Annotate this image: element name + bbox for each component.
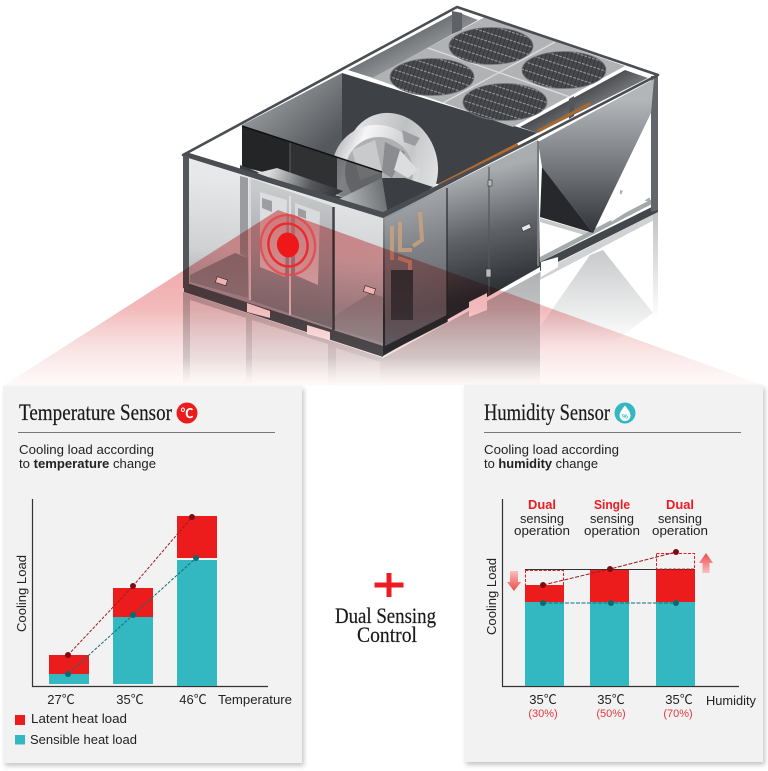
- icon: humidity badge: %: [622, 414, 628, 420]
- chart: temperature stacked bars: [14, 499, 292, 707]
- chart: humidity stacked bars: (70%): [663, 708, 693, 720]
- text: dual sensing control: [335, 603, 436, 647]
- icon: temperature badge: [176, 402, 198, 424]
- machine: copper pipes: [388, 143, 519, 216]
- sensing mode labels: Dual: [666, 497, 694, 512]
- machine: filter banks: [242, 126, 382, 198]
- text: dual sensing control: Control: [357, 622, 417, 647]
- arrow: humidity up: [699, 553, 713, 573]
- machine: interior floor left: [190, 253, 248, 298]
- machine: rear left wall: [242, 73, 342, 165]
- chart: temperature stacked bars: Temperature: [218, 692, 292, 707]
- machine: side handles: [486, 180, 531, 277]
- chart: humidity stacked bars: 35℃: [529, 692, 557, 707]
- sensing mode labels: Single: [594, 497, 630, 512]
- text: humidity description: [484, 442, 619, 471]
- sensing mode labels: operation: [652, 523, 708, 538]
- chart: temperature stacked bars: 27℃: [47, 692, 75, 707]
- machine: left post: [183, 155, 189, 290]
- heading: temperature sensor: Temperature Sensor: [19, 400, 172, 425]
- chart: humidity stacked bars: (30%): [528, 708, 558, 720]
- icon: plus: [374, 573, 404, 597]
- machine: fan deck: [372, 17, 625, 127]
- machine: deck seams: [428, 42, 570, 103]
- sensing mode labels: Dual: [528, 497, 556, 512]
- chart: humidity stacked bars: 35℃: [597, 692, 625, 707]
- machine: coil opening: [520, 70, 648, 133]
- sensing mode labels: sensing: [590, 511, 634, 526]
- machine: wedge: [540, 167, 593, 233]
- text: dual sensing control: Dual Sensing: [335, 603, 436, 628]
- panel: temperature sensor: [3, 386, 302, 763]
- machine: top frame: [183, 7, 658, 217]
- legend: [15, 711, 137, 747]
- chart: humidity stacked bars: Cooling Load: [484, 558, 499, 635]
- floor reflection: [183, 212, 658, 386]
- chart: humidity stacked bars: (50%): [596, 708, 626, 720]
- red sensing beam: [3, 210, 763, 386]
- machine: base white gaps: [469, 115, 651, 317]
- text: temperature description: [19, 442, 156, 471]
- sensing mode labels: operation: [584, 523, 640, 538]
- machine: top frame front edges: [183, 137, 538, 216]
- machine: front doors: [250, 178, 334, 330]
- machine: control box: [240, 165, 433, 217]
- machine: [183, 7, 658, 357]
- chart: temperature stacked bars: Cooling Load: [14, 555, 29, 632]
- machine: interior partition: [342, 73, 537, 184]
- icon: centrifugal blower: [320, 99, 453, 229]
- sensing mode labels: sensing: [520, 511, 564, 526]
- chart: temperature stacked bars: 35℃: [116, 692, 144, 707]
- machine: door seams: [447, 141, 538, 322]
- sensing mode labels: sensing: [658, 511, 702, 526]
- icon: condenser fans: [390, 28, 606, 120]
- machine: interior floor right: [333, 293, 383, 343]
- icon: humidity badge: [614, 402, 636, 424]
- machine: rear strip: [348, 12, 478, 78]
- icon: sensor target rings: [255, 210, 321, 280]
- chart: humidity stacked bars: [484, 499, 756, 720]
- sensing mode labels: [514, 497, 708, 538]
- text: temperature description: Cooling load according: [19, 442, 154, 457]
- machine: vertical strip: [240, 176, 248, 258]
- text: temperature description: to temperature change: [19, 456, 156, 471]
- text: humidity description: Cooling load according: [484, 442, 619, 457]
- legend: Sensible heat load: [30, 732, 137, 747]
- panel: humidity sensor: [464, 385, 763, 762]
- icon: temperature badge: ℃: [180, 406, 194, 421]
- sensing mode labels: operation: [514, 523, 570, 538]
- machine: right side face: [383, 140, 540, 356]
- machine: coil side face: [538, 79, 654, 233]
- chart: humidity stacked bars: Humidity: [706, 693, 756, 708]
- arrow: humidity down: [507, 571, 521, 591]
- text: humidity description: to humidity change: [484, 456, 598, 471]
- machine: base and right post: [540, 76, 658, 271]
- chart: humidity stacked bars: 35℃: [665, 692, 693, 707]
- legend: Latent heat load: [31, 711, 127, 726]
- heading: humidity sensor: Humidity Sensor: [484, 400, 610, 425]
- chart: temperature stacked bars: 46℃: [179, 692, 207, 707]
- machine: lower base front: [184, 277, 383, 357]
- machine: front left glass face: [184, 157, 383, 355]
- machine: rear post: [452, 11, 462, 34]
- machine: glass section with pipes: [385, 188, 447, 354]
